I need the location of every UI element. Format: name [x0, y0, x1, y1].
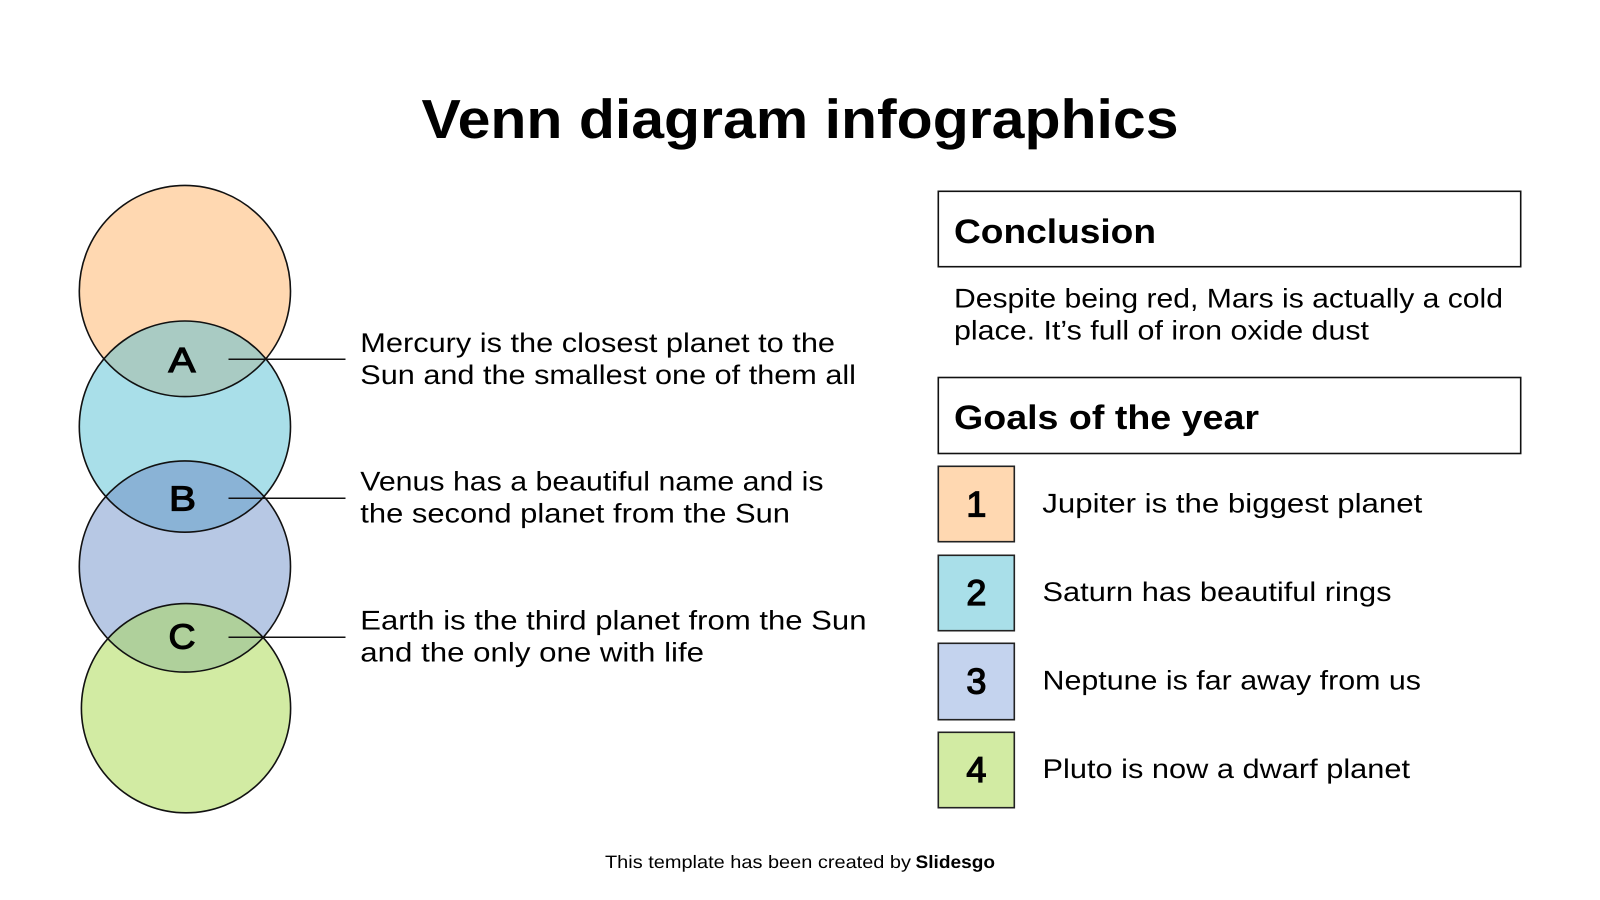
circle outlines — [79, 185, 291, 813]
goal 1: 1 — [966, 484, 986, 524]
overlap: C — [109, 604, 262, 672]
text: Venus: the second planet from the Sun — [360, 498, 790, 528]
connector line C — [228, 636, 346, 638]
panel: goals heading: Goals of the year — [954, 399, 1259, 437]
overlap: A — [105, 322, 264, 396]
text: conclusion body: place. It’s full of iron oxide dust — [954, 315, 1370, 345]
text: Venus — [360, 466, 824, 528]
connector line B — [228, 497, 346, 499]
goal 2 — [938, 555, 1392, 631]
goal 3: Neptune is far away from us — [1042, 666, 1421, 696]
text: conclusion body — [954, 283, 1503, 345]
circle: periwinkle — [79, 461, 291, 672]
text: Venus: Venus has a beautiful name and is — [360, 466, 824, 496]
connector line A — [228, 358, 346, 360]
text: Mercury: Sun and the smallest one of them all — [360, 360, 856, 390]
venn diagram — [79, 185, 291, 813]
letter A: A — [168, 341, 196, 380]
goal 1: Jupiter is the biggest planet — [1042, 489, 1423, 519]
text: Mercury — [360, 328, 856, 390]
circle: green — [81, 604, 291, 813]
text: Earth: Earth is the third planet from the Sun — [360, 606, 866, 636]
text: conclusion body: Despite being red, Mars is actually a cold — [954, 283, 1503, 313]
goal 2: Saturn has beautiful rings — [1042, 577, 1392, 607]
letter B: B — [169, 480, 196, 518]
goal 3: 3 — [966, 660, 986, 702]
overlap: B — [107, 462, 263, 532]
footer credit: This template has been created by — [605, 852, 911, 872]
panel: conclusion heading — [938, 191, 1521, 267]
footer credit: Slidesgo — [916, 852, 995, 872]
text: Earth — [360, 606, 866, 668]
title: Venn diagram infographics — [422, 88, 1178, 150]
goal 1 — [938, 466, 1423, 542]
goal 4: 4 — [966, 749, 986, 790]
text: Mercury: Mercury is the closest planet to the — [360, 328, 835, 358]
circle: orange — [79, 185, 291, 397]
goal 2: 2 — [966, 572, 986, 613]
circle: blue — [79, 321, 291, 532]
panel: goals heading — [938, 378, 1521, 454]
goal 4: Pluto is now a dwarf planet — [1042, 754, 1411, 784]
letter C: C — [168, 618, 196, 656]
goal 3 — [938, 643, 1421, 720]
panel: conclusion heading: Conclusion — [954, 213, 1156, 251]
text: Earth: and the only one with life — [360, 638, 704, 668]
goal 4 — [938, 732, 1411, 808]
